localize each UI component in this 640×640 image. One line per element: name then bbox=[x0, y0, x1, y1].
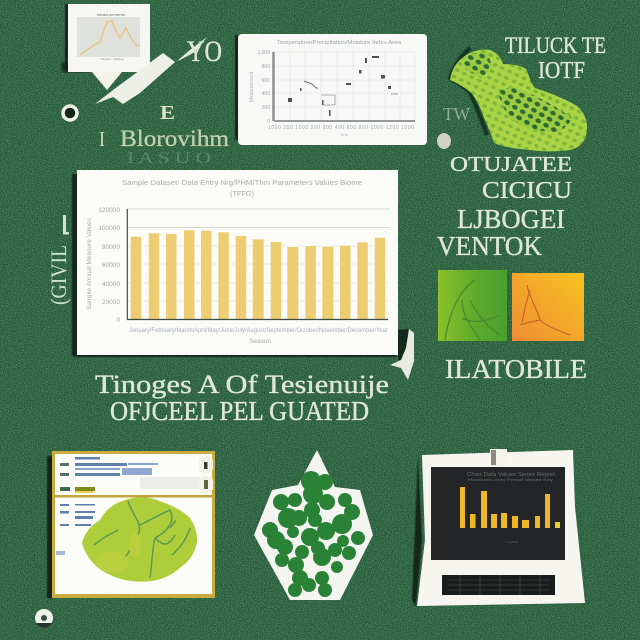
screen header text bbox=[467, 472, 556, 544]
window side buttons bbox=[199, 456, 213, 493]
title: main two-line heading: OFJCEEL PEL GUATED bbox=[110, 396, 369, 426]
title: main two-line heading: Tinoges A Of Tesienuije bbox=[95, 370, 389, 399]
chart grid and axes bbox=[274, 52, 415, 121]
laptop screen bbox=[431, 467, 565, 560]
screen header text: Measures over Period Values Key bbox=[468, 477, 553, 482]
small chart plot: Years Value bbox=[100, 57, 124, 61]
y axis tick labels: 60000 bbox=[102, 262, 120, 269]
keyboard bbox=[442, 575, 555, 595]
y axis labels: 200 bbox=[262, 105, 270, 111]
x axis title: Season bbox=[249, 338, 271, 345]
text label: TW: TW bbox=[443, 104, 470, 124]
y axis title: Sample Annual Measure Values bbox=[86, 217, 93, 310]
y axis labels: 1,000 bbox=[257, 50, 270, 56]
y axis labels bbox=[257, 50, 270, 125]
panel: orange flower swatch bbox=[512, 273, 584, 341]
panel: hexagon leaf cluster bbox=[254, 450, 373, 600]
scatter points bbox=[288, 56, 398, 116]
text block: left label: I A S U O bbox=[127, 150, 211, 167]
screen header text: Legend bbox=[505, 539, 518, 544]
x axis labels: 1000 200 1000 200 300 400 600 800 1000 1200 1000 bbox=[268, 125, 414, 131]
icon: green leaf-textured creature bbox=[450, 48, 587, 152]
panel: laptop with bar chart bbox=[412, 449, 585, 606]
icon: pebble bbox=[437, 133, 451, 149]
panel: small line chart callout bbox=[62, 4, 150, 90]
y axis tick labels: 120000 bbox=[98, 207, 120, 214]
small chart plot bbox=[77, 13, 140, 61]
y axis labels: 600 bbox=[262, 78, 270, 84]
text block: right paragraph: OTUJATEE bbox=[450, 152, 572, 176]
x axis labels: January/February/March/April/May/June/July/August/September/October/November/December/Year bbox=[129, 328, 388, 334]
bars bbox=[131, 230, 385, 319]
screen header text: Chart Data Values Series Report bbox=[467, 472, 556, 478]
icon: white quill bbox=[95, 37, 207, 104]
text label: rotated side caption: (GIVIL bbox=[46, 245, 71, 305]
gridlines bbox=[127, 209, 390, 301]
icon: curled white tail bbox=[390, 329, 414, 380]
text label: swatch caption: ILATOBILE bbox=[445, 354, 587, 384]
small chart plot: Measurements bbox=[97, 13, 125, 17]
y axis labels: 400 bbox=[262, 91, 270, 97]
window toolbar rows bbox=[56, 457, 200, 555]
title: main two-line heading bbox=[95, 370, 389, 426]
text block: right paragraph: CICICU bbox=[482, 178, 572, 204]
text block: left label bbox=[99, 102, 229, 167]
chart title: Sample Dataset: Data Entry Nrg/PHM/Thm Parameters Values Biome bbox=[122, 180, 362, 187]
text block: right paragraph: LJBOGEI bbox=[457, 204, 565, 234]
panel: lettuce map window bbox=[47, 451, 215, 598]
text block: top right heading bbox=[505, 33, 606, 84]
panel: main bar chart card bbox=[72, 170, 398, 357]
lettuce shape bbox=[82, 497, 197, 582]
panel: green leaf swatch bbox=[438, 270, 507, 341]
y axis tick labels: 100000 bbox=[98, 225, 120, 232]
y axis tick labels: 40000 bbox=[102, 281, 120, 288]
text block: top right heading: IOTF bbox=[538, 58, 585, 84]
axes bbox=[127, 209, 388, 320]
text block: top right heading: TILUCK TE bbox=[505, 33, 606, 58]
panel: scatter chart card: Measurement bbox=[249, 71, 255, 102]
y axis tick labels: 80000 bbox=[102, 244, 120, 251]
panel: scatter chart card: Temperature/Precipitation/Moisture Index Area bbox=[277, 40, 401, 46]
text block: left label: I bbox=[99, 127, 105, 151]
y axis labels: 0 bbox=[267, 119, 270, 125]
y axis labels: 800 bbox=[262, 64, 270, 70]
icon: white button ball bbox=[35, 609, 53, 628]
chart title bbox=[122, 180, 362, 198]
heading: XO mark: YO bbox=[187, 35, 222, 68]
icon: ring O bbox=[63, 106, 77, 120]
y axis tick labels: 20000 bbox=[102, 299, 120, 306]
text block: right paragraph: VENTOK bbox=[437, 231, 542, 261]
y axis tick labels: 0 bbox=[116, 317, 120, 324]
panel: scatter chart card: Year bbox=[340, 132, 349, 137]
leaf clusters bbox=[262, 471, 365, 597]
text block: left label: Blorovihm bbox=[120, 126, 229, 151]
tape tab bbox=[490, 449, 507, 465]
chart title: (TFFG) bbox=[230, 191, 254, 198]
screen bars bbox=[460, 487, 560, 528]
text block: left label: E bbox=[160, 102, 175, 124]
panel: scatter chart card bbox=[235, 34, 427, 145]
y axis tick labels bbox=[98, 207, 120, 324]
text block: right paragraph bbox=[437, 152, 572, 261]
